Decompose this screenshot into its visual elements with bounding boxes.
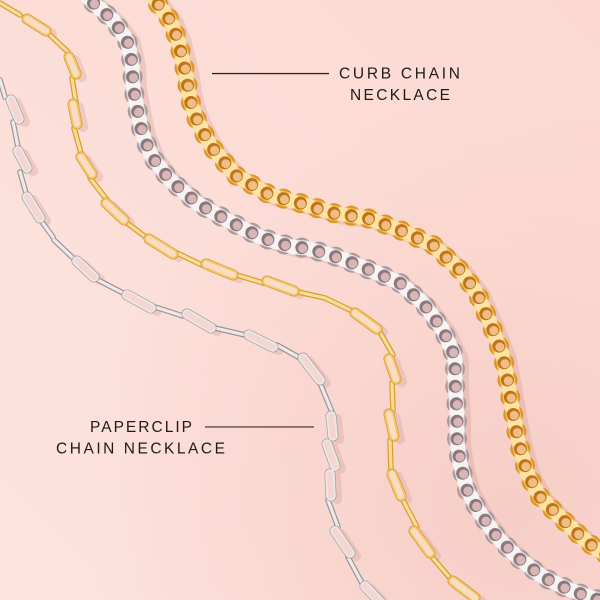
label: paperclip chain necklace (56, 419, 314, 458)
label: paperclip chain necklace: CHAIN NECKLACE (56, 440, 225, 458)
label: paperclip chain necklace: PAPERCLIP (90, 419, 192, 436)
gold curb chain (148, 0, 600, 561)
label: curb chain necklace (212, 66, 460, 104)
label: curb chain necklace: CURB CHAIN (339, 66, 460, 82)
silver paperclip chain (0, 80, 386, 600)
label: curb chain necklace: NECKLACE (350, 87, 450, 104)
gold paperclip chain (0, 3, 481, 600)
